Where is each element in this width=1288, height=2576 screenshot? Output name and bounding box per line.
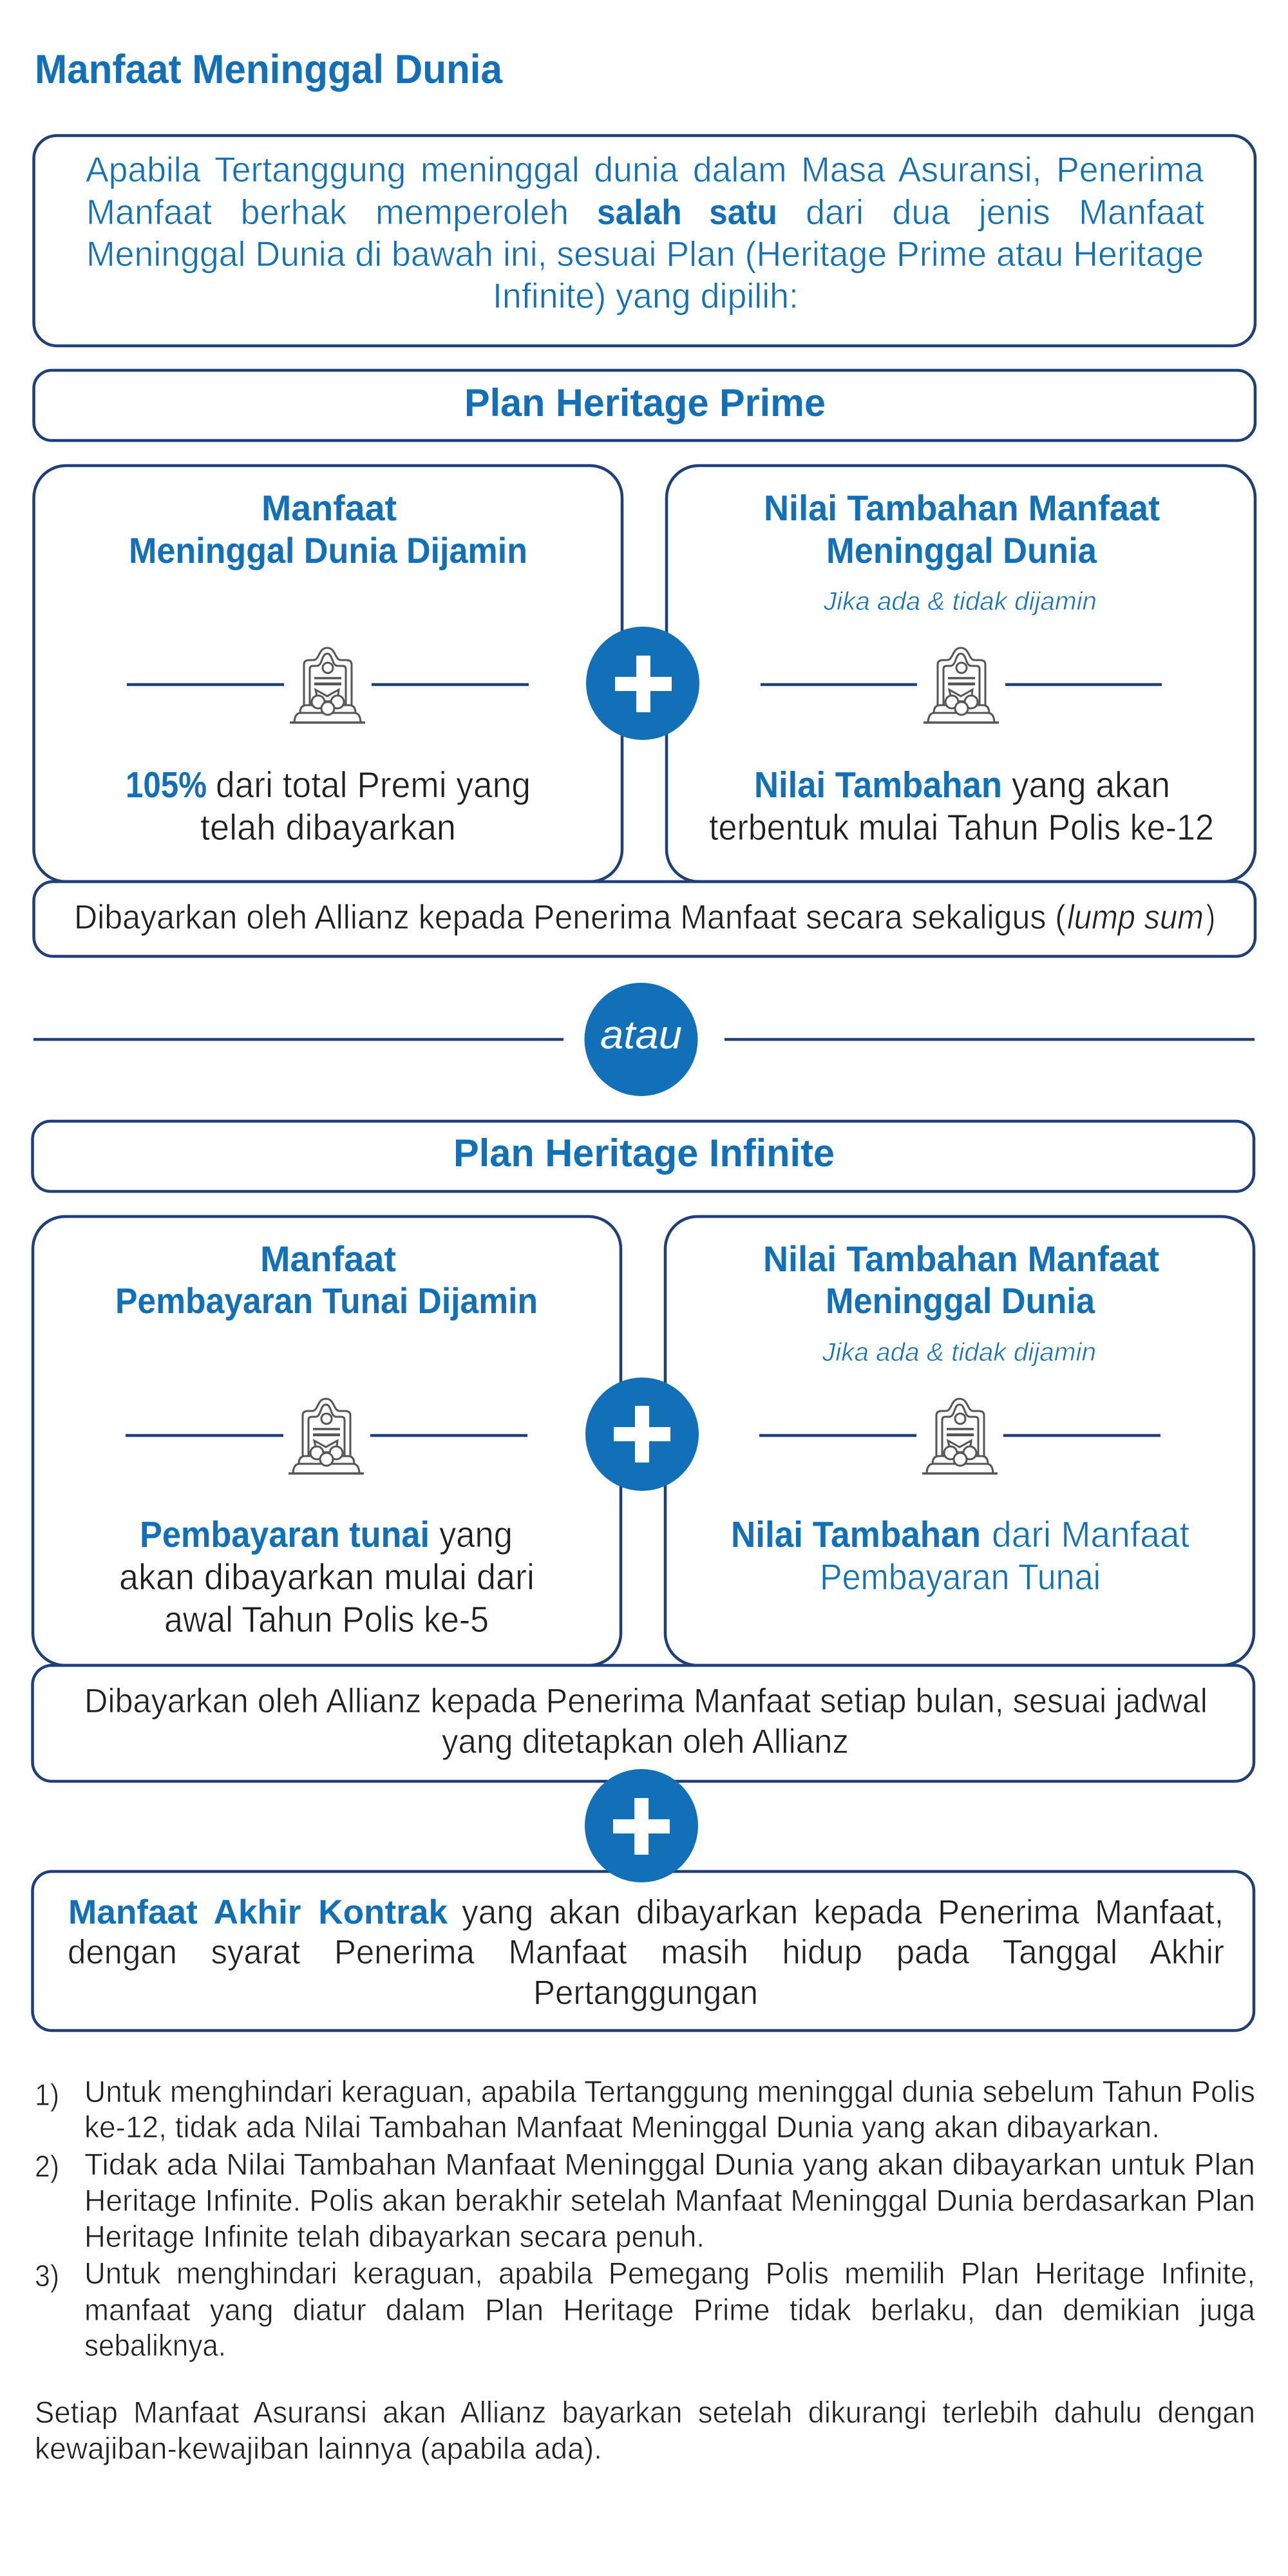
card note: Jika ada & tidak dijamin (822, 1338, 1096, 1367)
intro line 3: Meninggal Dunia di bawah ini, sesuai Plan (Heritage Prime atau Heritage (86, 234, 1204, 274)
panel: Manfaat Akhir Kontrak: Manfaat Akhir Kontrak (68, 1893, 448, 1931)
intro line 2: dari dua jenis Manfaat (806, 192, 1204, 232)
card heading: Nilai Tambahan Manfaat (763, 1238, 1159, 1279)
panel: monthly payment: Dibayarkan oleh Allianz kepada Penerima Manfaat setiap bulan, sesuai jadwal (84, 1682, 1208, 1720)
panel: Manfaat Akhir Kontrak: Pertanggungan (533, 1974, 758, 2012)
footnote 2 (35, 2147, 1255, 2253)
card heading: Meninggal Dunia (826, 1280, 1095, 1321)
card heading: Meninggal Dunia (826, 530, 1097, 571)
closing statement: kewajiban-kewajiban lainnya (apabila ada). (35, 2431, 602, 2465)
closing statement (35, 2395, 1255, 2465)
footnote 2: Heritage Infinite. Polis akan berakhir setelah Manfaat Meninggal Dunia berdasarkan Plan (84, 2183, 1255, 2217)
card description: 105% (126, 764, 207, 806)
card heading: Manfaat (261, 488, 397, 528)
card description (709, 764, 1214, 848)
divider with icon: tombstone (761, 648, 1162, 723)
footnote 1: 1) (35, 2078, 59, 2112)
panel: Manfaat Akhir Kontrak: dengan syarat Penerima Manfaat masih hidup pada Tanggal Akhir (68, 1933, 1224, 1971)
icon: plus circle (Infinite) (585, 1378, 699, 1491)
card heading: Manfaat (260, 1238, 396, 1279)
intro line 2: salah satu (597, 192, 777, 232)
footnote 2: Tidak ada Nilai Tambahan Manfaat Meninggal Dunia yang akan dibayarkan untuk Plan (84, 2147, 1255, 2181)
closing statement: Setiap Manfaat Asuransi akan Allianz bayarkan setelah dikurangi terlebih dahulu dengan (35, 2395, 1255, 2429)
panel: Manfaat Akhir Kontrak (32, 1871, 1254, 2031)
footnote 3: sebaliknya. (84, 2328, 226, 2362)
panel: Plan Heritage Prime heading: Plan Heritage Prime (464, 381, 826, 424)
panel: lump sum payment: ) (1206, 898, 1215, 936)
panel: lump sum payment: lump sum (1067, 898, 1204, 936)
footnote 1: Untuk menghindari keraguan, apabila Tertanggung meninggal dunia sebelum Tahun Polis (84, 2074, 1255, 2108)
footnote 3 (35, 2256, 1256, 2362)
card description: dari total Premi yang (216, 764, 531, 806)
divider: atau: atau (600, 1013, 682, 1057)
panel: Plan Heritage Infinite heading (32, 1121, 1254, 1191)
footnote 1: ke-12, tidak ada Nilai Tambahan Manfaat Meninggal Dunia yang akan dibayarkan. (84, 2110, 1160, 2144)
panel: Manfaat Akhir Kontrak: yang akan dibayarkan kepada Penerima Manfaat, (462, 1893, 1224, 1931)
card heading: Nilai Tambahan Manfaat (764, 488, 1160, 528)
footnote 3: manfaat yang diatur dalam Plan Heritage Prime tidak berlaku, dan demikian juga (84, 2293, 1256, 2327)
panel: Manfaat Pembayaran Tunai Dijamin (33, 1217, 621, 1665)
panel: Plan Heritage Infinite heading: Plan Heritage Infinite (453, 1132, 835, 1175)
divider with icon: tombstone (126, 1399, 527, 1473)
footnote 3: Untuk menghindari keraguan, apabila Pemegang Polis memilih Plan Heritage Infinite, (84, 2256, 1255, 2290)
title: Manfaat Meninggal Dunia (35, 47, 503, 92)
card description: telah dibayarkan (200, 807, 456, 848)
card heading (763, 1238, 1159, 1321)
divider with icon: tombstone (759, 1399, 1160, 1473)
card description: awal Tahun Polis ke-5 (164, 1599, 489, 1640)
card description: yang akan (1012, 764, 1170, 806)
panel: Plan Heritage Prime heading (33, 370, 1255, 440)
panel: monthly payment (32, 1665, 1254, 1781)
panel: lump sum payment (33, 882, 1255, 956)
footnote 1 (35, 2074, 1255, 2144)
icon: plus circle (final benefit) (585, 1769, 698, 1882)
card description (731, 1514, 1189, 1598)
card description: Pembayaran Tunai (820, 1557, 1101, 1598)
card description: dari Manfaat (992, 1514, 1189, 1555)
card heading (115, 1238, 538, 1321)
footnote 2: Heritage Infinite telah dibayarkan secara penuh. (84, 2219, 705, 2253)
card heading (129, 488, 527, 571)
panel: lump sum payment: Dibayarkan oleh Allianz kepada Penerima Manfaat secara sekaligus ( (74, 898, 1066, 936)
card description: yang (439, 1514, 513, 1555)
footnote 3: 3) (35, 2259, 59, 2293)
divider: atau (33, 983, 1255, 1096)
card heading: Meninggal Dunia Dijamin (129, 530, 527, 571)
panel: Manfaat Meninggal Dunia Dijamin (33, 466, 622, 882)
card description: akan dibayarkan mulai dari (119, 1557, 535, 1598)
panel: monthly payment: yang ditetapkan oleh Allianz (442, 1723, 849, 1761)
card heading (764, 488, 1160, 571)
card description: Pembayaran tunai (140, 1514, 430, 1555)
divider with icon: tombstone (127, 648, 529, 723)
intro line 2 (86, 192, 1204, 232)
icon: plus circle (Prime) (586, 627, 699, 740)
card description (126, 764, 531, 848)
footnote 2: 2) (35, 2149, 59, 2183)
panel: intro (33, 135, 1255, 346)
intro line 4: Infinite) yang dipilih: (493, 276, 799, 316)
card description: Nilai Tambahan (731, 1514, 981, 1555)
card note: Jika ada & tidak dijamin (823, 587, 1097, 616)
card description: terbentuk mulai Tahun Polis ke-12 (709, 807, 1214, 848)
card description (119, 1514, 535, 1640)
panel: Nilai Tambahan Manfaat Meninggal Dunia (Infinite) (665, 1217, 1254, 1665)
panel: Nilai Tambahan Manfaat Meninggal Dunia (Prime) (667, 466, 1255, 882)
intro line 2: Manfaat berhak memperoleh (86, 192, 569, 232)
intro line 1: Apabila Tertanggung meninggal dunia dalam Masa Asuransi, Penerima (86, 149, 1204, 189)
card heading: Pembayaran Tunai Dijamin (115, 1280, 538, 1321)
card description: Nilai Tambahan (754, 764, 1002, 806)
